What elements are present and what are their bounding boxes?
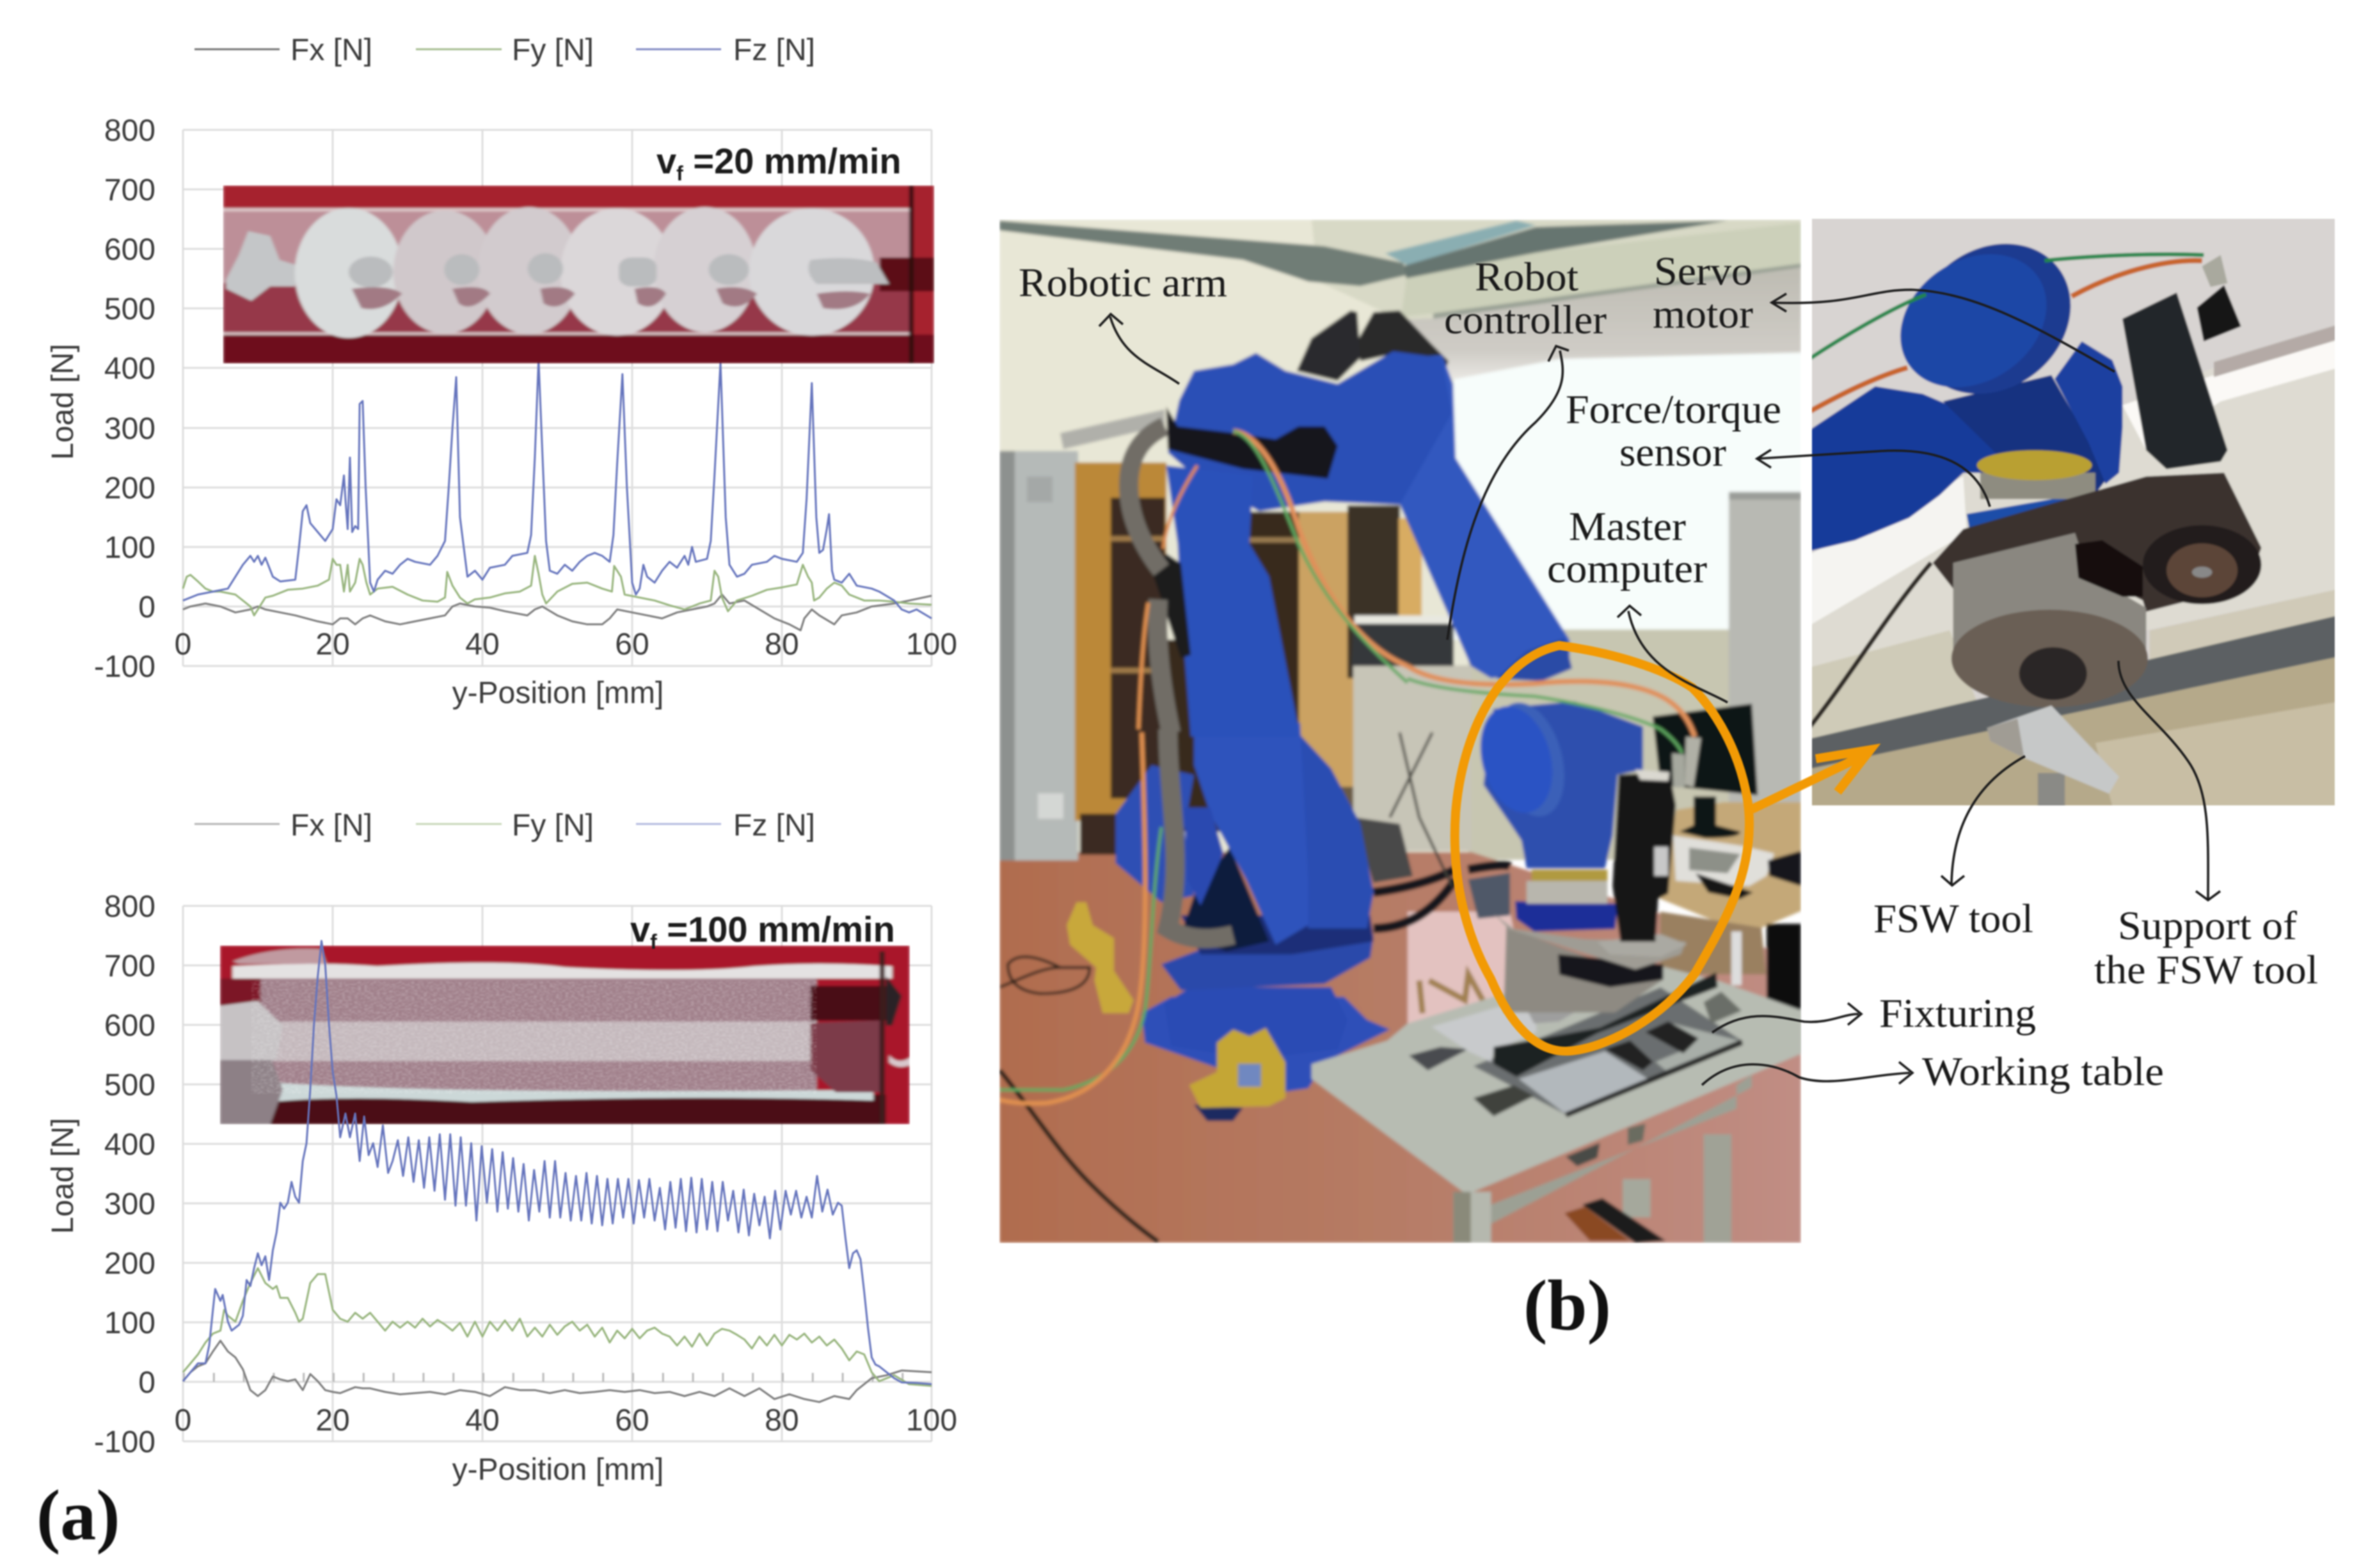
x axis tick labels: 60 bbox=[615, 1404, 649, 1437]
x axis tick labels: 20 bbox=[315, 1404, 350, 1437]
x axis tick labels: 100 bbox=[906, 1404, 957, 1437]
label: support of the FSW tool: the FSW tool bbox=[2094, 947, 2318, 992]
label: feed rate 20 mm/min: =20 mm/min bbox=[683, 141, 902, 181]
arrow: robot controller bbox=[1447, 346, 1569, 640]
y axis tick labels: 800 bbox=[104, 890, 155, 924]
legend: 20 mm/min chart: Fz [N] bbox=[733, 33, 815, 67]
label: feed rate 100 mm/min: =100 mm/min bbox=[657, 909, 895, 949]
arrow: fixturing bbox=[1712, 1003, 1861, 1033]
blue robot arm bbox=[1808, 216, 2122, 551]
desk with monitor and papers bbox=[1653, 704, 1801, 1033]
y axis tick labels: 100 bbox=[104, 1306, 155, 1340]
legend: 100 mm/min chart bbox=[195, 809, 815, 843]
label: support of the FSW tool: Support of bbox=[2118, 903, 2298, 948]
wrist and disc cover bbox=[1469, 638, 1643, 868]
photo: continuous weld sample bbox=[220, 946, 910, 1124]
x axis title: y-Position [mm] bbox=[452, 676, 664, 710]
label: robot controller: controller bbox=[1444, 297, 1607, 342]
y axis title: Load [N] bbox=[46, 1118, 80, 1234]
y axis title: Load [N] bbox=[46, 344, 80, 460]
label: feed rate 20 mm/min: v bbox=[656, 141, 676, 181]
photo: weld sample with overlapping discs bbox=[223, 186, 934, 363]
cable wrap bbox=[1129, 427, 1233, 938]
upper arm bbox=[1397, 352, 1571, 680]
lower arm, side casing and joint bbox=[1116, 723, 1374, 951]
robot base bbox=[1141, 915, 1390, 1091]
fixturing plates and rail bbox=[1409, 972, 1743, 1117]
x axis tick labels: 100 bbox=[906, 628, 957, 661]
servo motor and connectors bbox=[1598, 737, 1701, 957]
y axis tick labels bbox=[94, 890, 155, 1459]
ceiling and pipes background bbox=[1808, 218, 2339, 806]
x axis tick labels: 0 bbox=[175, 1404, 191, 1437]
shoulder and lower arm top bbox=[1152, 351, 1452, 736]
label: master computer: computer bbox=[1547, 546, 1707, 591]
support of FSW tool bbox=[1493, 914, 1686, 1013]
label: servo motor: Servo bbox=[1654, 248, 1752, 294]
label: feed rate 100 mm/min: f bbox=[650, 930, 657, 953]
panel: load chart at 20 mm/min bbox=[46, 33, 957, 710]
label: feed rate 20 mm/min: f bbox=[676, 162, 683, 185]
force sensor and flange bbox=[1515, 869, 1617, 931]
orange arrow to close-up bbox=[1752, 750, 1870, 809]
cables bbox=[1808, 255, 2204, 730]
sensor rings bbox=[1967, 450, 2099, 533]
line chart: Fx Fy Fz at 100 mm/min bbox=[183, 941, 932, 1402]
legend: 20 mm/min chart: Fx [N] bbox=[290, 33, 372, 67]
label: robot controller: Robot bbox=[1475, 254, 1578, 299]
floor cables bbox=[1000, 957, 1158, 1242]
black motors on shoulder bbox=[1297, 310, 1449, 381]
x axis tick labels: 60 bbox=[615, 628, 649, 661]
x axis tick labels: 40 bbox=[465, 1404, 500, 1437]
label: working table: Working table bbox=[1922, 1049, 2164, 1094]
y axis tick labels: -100 bbox=[94, 1425, 155, 1459]
label: feed rate 100 mm/min: v bbox=[630, 909, 650, 949]
x axis tick labels: 40 bbox=[465, 628, 500, 661]
arrow: robotic arm bbox=[1099, 314, 1179, 384]
reflected pink floor bbox=[1405, 908, 1515, 1025]
label: force torque sensor bbox=[1566, 386, 1781, 475]
arrow: master computer bbox=[1617, 606, 1728, 702]
x axis tick labels: 20 bbox=[315, 628, 350, 661]
photo: close-up of FSW end effector bbox=[1808, 216, 2339, 807]
y axis tick labels: 200 bbox=[104, 1247, 155, 1281]
legend: 20 mm/min chart: Fy [N] bbox=[512, 33, 594, 67]
y axis tick labels: 600 bbox=[104, 233, 155, 267]
yellow lifting lugs bbox=[1067, 902, 1285, 1121]
working table bbox=[1312, 966, 1802, 1243]
equipment and black cable bundle behind robot bbox=[1354, 733, 1510, 1013]
legend: 100 mm/min chart: Fx [N] bbox=[290, 809, 372, 843]
y axis tick labels: 500 bbox=[104, 1068, 155, 1102]
y axis tick labels: 600 bbox=[104, 1009, 155, 1043]
y axis tick labels: 0 bbox=[138, 1366, 155, 1400]
orange and green cables bbox=[1000, 431, 1695, 1104]
arrow: servo motor bbox=[1772, 290, 2115, 372]
wooden cabinets with mesh bbox=[1075, 463, 1422, 855]
y axis tick labels: -100 bbox=[94, 650, 155, 684]
y axis tick labels: 700 bbox=[104, 949, 155, 983]
label: fixturing: Fixturing bbox=[1879, 990, 2036, 1036]
x axis title: y-Position [mm] bbox=[452, 1453, 664, 1487]
y axis tick labels: 300 bbox=[104, 412, 155, 446]
label: force torque sensor: sensor bbox=[1619, 429, 1726, 475]
label: servo motor: motor bbox=[1653, 291, 1753, 337]
y axis tick labels: 400 bbox=[104, 352, 155, 386]
x axis tick labels bbox=[175, 628, 957, 661]
label: force torque sensor: Force/torque bbox=[1566, 386, 1781, 432]
wall, ceiling beams and window bbox=[999, 219, 1801, 860]
panel label (a): (a) bbox=[36, 1476, 120, 1555]
orange highlight ellipse bbox=[1455, 645, 1749, 1051]
servo motor and connector bbox=[2122, 255, 2241, 469]
floor bbox=[999, 852, 1801, 1243]
arrow: working table bbox=[1702, 1062, 1912, 1085]
y axis tick labels: 300 bbox=[104, 1187, 155, 1221]
robot controller cabinet bbox=[1351, 615, 1472, 851]
panel: load chart at 100 mm/min bbox=[46, 809, 957, 1487]
x axis tick labels: 80 bbox=[765, 1404, 799, 1437]
photo: friction stir welding robot cell bbox=[999, 219, 1802, 1243]
y axis tick labels: 700 bbox=[104, 173, 155, 207]
legend: 100 mm/min chart: Fz [N] bbox=[733, 809, 815, 843]
pulley bbox=[2143, 525, 2261, 604]
x axis tick labels bbox=[175, 1404, 957, 1437]
label: servo motor bbox=[1653, 248, 1753, 337]
legend: 20 mm/min chart bbox=[195, 33, 815, 67]
y axis tick labels: 800 bbox=[104, 114, 155, 148]
y axis tick labels bbox=[94, 114, 155, 684]
locker bbox=[999, 451, 1078, 860]
label: FSW tool: FSW tool bbox=[1873, 896, 2033, 941]
FSW tool block bbox=[1987, 706, 2119, 807]
mounting plate bbox=[1933, 473, 2261, 612]
line chart: Fx Fy Fz at 20 mm/min bbox=[183, 360, 932, 630]
label: support of the FSW tool bbox=[2094, 903, 2318, 992]
label: master computer: Master bbox=[1569, 503, 1686, 549]
panel label (b): (b) bbox=[1523, 1266, 1611, 1345]
y axis tick labels: 0 bbox=[138, 590, 155, 624]
label: robot controller bbox=[1444, 254, 1607, 342]
arrow: FSW tool bbox=[1941, 756, 2025, 885]
x axis tick labels: 80 bbox=[765, 628, 799, 661]
label: robotic arm: Robotic arm bbox=[1019, 260, 1227, 305]
label: master computer bbox=[1547, 503, 1707, 591]
y axis tick labels: 500 bbox=[104, 292, 155, 326]
support cylinder bbox=[1951, 533, 2148, 708]
y axis tick labels: 400 bbox=[104, 1128, 155, 1162]
legend: 100 mm/min chart: Fy [N] bbox=[512, 809, 594, 843]
x axis tick labels: 0 bbox=[175, 628, 191, 661]
y axis tick labels: 100 bbox=[104, 531, 155, 565]
arrow: force torque sensor bbox=[1757, 450, 1990, 507]
y axis tick labels: 200 bbox=[104, 471, 155, 505]
arrow: support of the FSW tool bbox=[2118, 661, 2220, 900]
